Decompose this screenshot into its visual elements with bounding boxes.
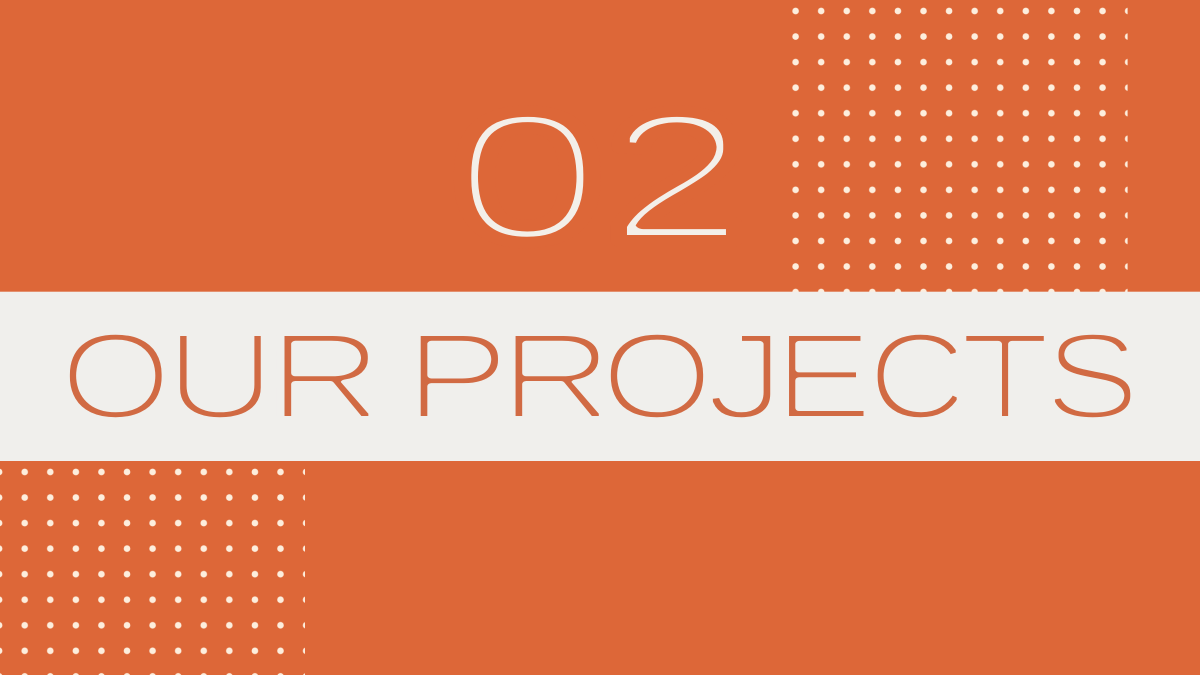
title: OUR PROJECTS: T	[959, 308, 1051, 445]
title: OUR PROJECTS: O	[59, 307, 172, 445]
title: OUR PROJECTS: R	[267, 308, 384, 445]
section number	[452, 76, 747, 277]
white title band	[0, 292, 1200, 461]
dot pattern: top right	[780, 0, 1128, 292]
title: OUR PROJECTS: P	[403, 308, 511, 445]
title: OUR PROJECTS	[59, 307, 1141, 445]
title: OUR PROJECTS: J	[705, 307, 787, 445]
title: OUR PROJECTS: R	[498, 308, 614, 445]
section number: 2	[606, 76, 747, 277]
section number: 0	[452, 76, 603, 277]
title: OUR PROJECTS: C	[867, 307, 967, 444]
title: OUR PROJECTS: O	[600, 307, 714, 445]
dot pattern: bottom left	[0, 461, 305, 675]
title: OUR PROJECTS: E	[773, 308, 874, 445]
title: OUR PROJECTS: S	[1043, 307, 1141, 445]
title: OUR PROJECTS: U	[164, 307, 277, 444]
